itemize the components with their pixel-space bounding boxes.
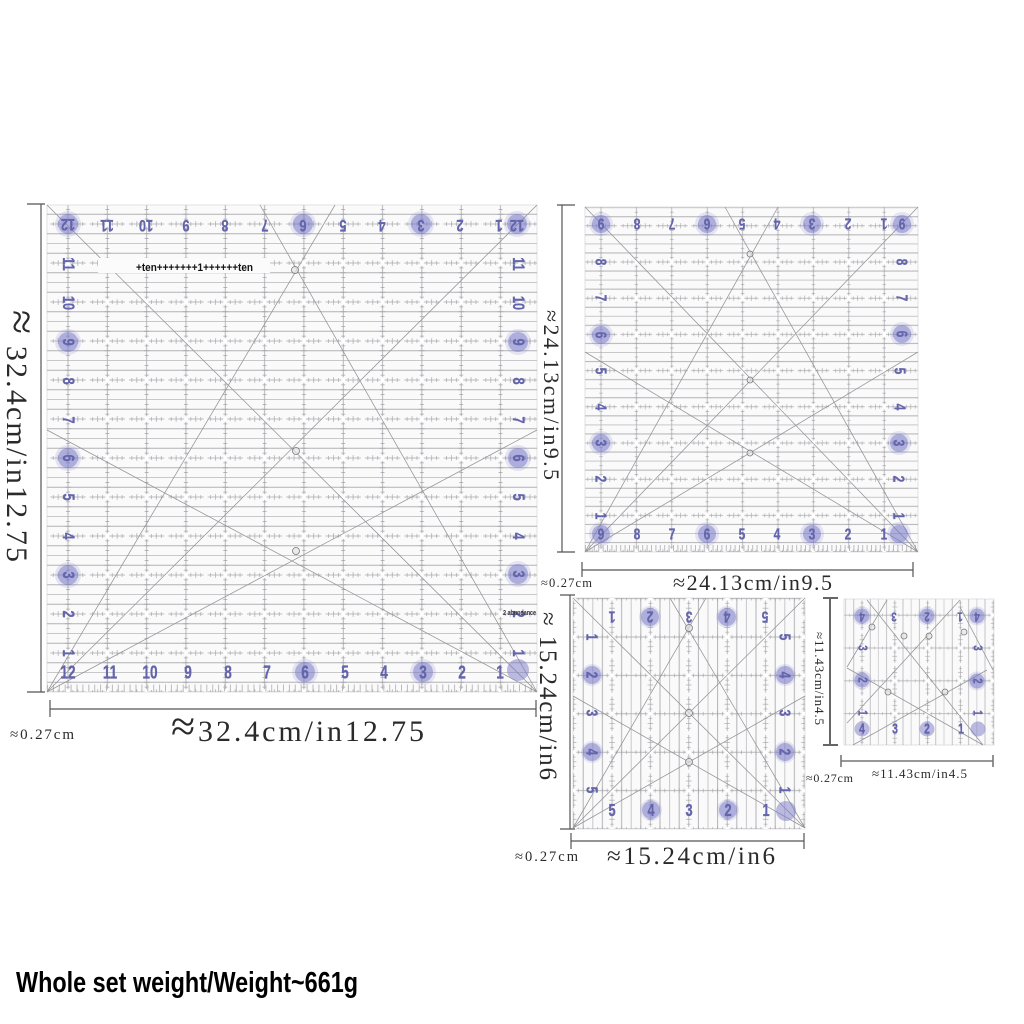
scale numbers: mini ruler: 4 [859,721,865,737]
scale numbers: medium ruler: 1 [881,215,887,233]
scale numbers: small ruler: 5 [776,634,794,640]
scale numbers: medium ruler: 8 [634,215,640,233]
blue circle markers: small ruler [581,606,796,821]
scale numbers: medium ruler: 2 [592,476,610,482]
scale numbers: large ruler: 4 [508,532,528,540]
scale numbers: mini ruler: 2 [924,721,930,737]
scale numbers: medium ruler: 9 [598,525,604,543]
scale numbers: small ruler: 1 [583,634,601,640]
measurement holes: small ruler [686,624,692,766]
scale numbers: large ruler: 7 [263,663,271,683]
scale numbers: large ruler: 11 [508,257,528,271]
scale numbers: small ruler: 4 [776,672,794,678]
scale numbers: large ruler: 1 [496,663,504,683]
scale numbers: medium ruler: 7 [592,295,610,301]
scale numbers: medium ruler: 7 [669,215,675,233]
scale numbers: small ruler [583,608,794,821]
scale numbers: large ruler: 4 [378,215,386,235]
scale numbers: large ruler: 3 [58,571,78,579]
scale numbers: small ruler: 1 [776,787,794,793]
scale numbers: large ruler: 7 [261,215,269,235]
label: medium vertical: ≈24.13cm/in9.5 [539,310,564,480]
label: mini horizontal: ≈11.43cm/in4.5 [872,766,967,781]
scale numbers: mini ruler: 1 [957,609,963,623]
scale numbers: medium ruler: 4 [774,215,780,233]
scale numbers: medium ruler: 5 [891,368,909,374]
label: small gap right: ≈0.27cm [806,771,854,785]
scale numbers: mini ruler: 3 [891,609,897,623]
scale numbers: medium ruler: 1 [890,513,908,519]
scale numbers: mini ruler: 4 [859,609,865,623]
scale numbers: mini ruler [855,609,984,737]
scale numbers: large ruler: 5 [341,663,349,683]
scale numbers: small ruler: 5 [762,608,768,626]
scale numbers: small ruler: 4 [583,749,601,755]
scale numbers: large ruler: 2 [58,610,78,618]
scale numbers: large ruler: 10 [142,663,158,683]
scale numbers: large ruler [58,214,528,683]
scale numbers: large ruler: 11 [103,663,117,683]
scale numbers: medium ruler [592,215,911,543]
scale numbers: small ruler: 4 [647,801,655,821]
scale numbers: large ruler: 7 [58,416,78,424]
scale numbers: large ruler: 10 [139,215,153,235]
scale numbers: large ruler: 12 [510,215,524,235]
scale numbers: medium ruler: 8 [893,259,911,265]
scale numbers: small ruler: 3 [686,608,692,626]
scale numbers: large ruler: 5 [339,215,347,235]
scale numbers: large ruler: 5 [508,493,528,501]
scale numbers: medium ruler: 8 [634,525,640,543]
scale numbers: medium ruler: 9 [598,215,604,233]
scale numbers: medium ruler: 5 [592,368,610,374]
scale numbers: small ruler: 3 [776,710,794,716]
scale numbers: medium ruler: 3 [809,525,815,543]
scale numbers: medium ruler: 3 [592,440,610,446]
scale numbers: large ruler: 10 [508,296,528,310]
scale numbers: large ruler: 8 [224,663,232,683]
label: large horizontal: ≈32.4cm/in12.75 [171,702,424,751]
dimension bars [27,204,993,849]
scale numbers: large ruler: 6 [58,454,78,462]
measurement holes: large ruler [292,266,300,554]
scale numbers: mini ruler: 1 [855,710,869,716]
scale numbers: medium ruler: 1 [592,513,610,519]
scale numbers: small ruler: 5 [583,787,601,793]
blue circle markers: large ruler [55,211,531,685]
scale numbers: medium ruler: 4 [891,404,909,410]
blue circle markers: mini ruler [852,606,986,736]
scale numbers: mini ruler: 2 [855,677,869,683]
label: medium gap: ≈0.27cm [541,576,592,590]
scale numbers: small ruler: 4 [724,608,730,626]
weight caption: Whole set weight/Weight~661g [16,967,358,999]
label: mini vertical: ≈11.43cm/in4.5 [812,632,827,725]
scale numbers: medium ruler: 1 [881,525,887,543]
scale numbers: large ruler: 3 [417,215,425,235]
scale numbers: mini ruler: 1 [958,721,964,737]
scale numbers: medium ruler: 2 [845,525,851,543]
panel: medium ruler 9.5 in [585,207,918,552]
scale numbers: small ruler: 1 [609,608,615,626]
scale numbers: large ruler: 1 [58,649,78,657]
scale numbers: mini ruler: 3 [970,645,984,651]
scale numbers: small ruler: 2 [583,672,601,678]
scale numbers: large ruler: 6 [508,454,528,462]
scale numbers: large ruler: 9 [184,663,192,683]
label: small gap left: ≈0.27cm [515,849,579,865]
scale numbers: medium ruler: 5 [739,215,745,233]
printed label: +ten+++++++1++++++ten [136,262,253,274]
scale numbers: large ruler: 9 [58,338,78,346]
blue circle markers: medium ruler [589,212,914,546]
scale numbers: medium ruler: 6 [893,331,911,337]
scale numbers: medium ruler: 6 [704,525,710,543]
scale numbers: medium ruler: 7 [669,525,675,543]
panel: mini ruler 4.5 in [844,599,994,745]
scale numbers: large ruler: 11 [100,215,114,235]
scale numbers: small ruler: 2 [724,801,732,821]
scale numbers: mini ruler: 2 [924,609,930,623]
scale numbers: medium ruler: 5 [739,525,745,543]
guide lines: small ruler [573,598,805,828]
scale numbers: medium ruler: 3 [809,215,815,233]
scale numbers: large ruler: 2 [508,610,528,618]
scale numbers: large ruler: 4 [380,663,388,683]
scale numbers: large ruler: 3 [508,570,528,578]
scale numbers: large ruler: 3 [419,663,427,683]
scale numbers: large ruler: 9 [182,215,190,235]
panel: large ruler 12.75 in [47,205,537,692]
panel: small ruler 6 in [573,598,805,829]
label: medium horizontal: ≈24.13cm/in9.5 [673,570,832,595]
guide lines: medium ruler [585,207,918,552]
scale numbers: large ruler: 8 [58,377,78,385]
scale numbers: mini ruler: 3 [892,721,898,737]
scale numbers: large ruler: 12 [61,214,75,234]
scale numbers: large ruler: 11 [58,257,78,271]
scale numbers: medium ruler: 2 [845,215,851,233]
scale numbers: large ruler: 7 [508,416,528,424]
scale numbers: medium ruler: 8 [592,259,610,265]
scale numbers: large ruler: 5 [58,493,78,501]
scale numbers: mini ruler: 1 [970,710,984,716]
scale numbers: large ruler: 12 [60,663,76,683]
scale numbers: medium ruler: 6 [704,215,710,233]
scale numbers: large ruler: 10 [58,296,78,310]
label: small vertical: ≈ 15.24cm/in6 [534,612,561,780]
scale numbers: mini ruler: 3 [855,645,869,651]
scale numbers: small ruler: 3 [583,710,601,716]
guide lines: mini ruler [847,600,993,745]
scale numbers: large ruler: 1 [495,215,503,235]
scale numbers: small ruler: 5 [608,801,616,821]
guide lines: large ruler [47,205,537,692]
scale numbers: large ruler: 6 [299,215,307,235]
scale numbers: mini ruler: 4 [974,609,980,623]
scale numbers: medium ruler: 3 [890,440,908,446]
scale numbers: medium ruler: 6 [592,332,610,338]
scale numbers: small ruler: 3 [685,801,693,821]
white label patch [98,258,270,273]
scale numbers: large ruler: 1 [508,649,528,657]
scale numbers: medium ruler: 4 [592,404,610,410]
brand text: 2 abundance [503,608,536,617]
scale numbers: large ruler: 6 [301,663,309,683]
scale numbers: small ruler: 2 [647,608,653,626]
scale numbers: large ruler: 2 [456,215,464,235]
scale numbers: large ruler: 2 [458,663,466,683]
scale numbers: medium ruler: 2 [890,476,908,482]
scale numbers: large ruler: 8 [221,215,229,235]
measurement holes: mini ruler [869,624,967,695]
scale numbers: medium ruler: 9 [899,215,905,233]
scale numbers: small ruler: 1 [762,801,770,821]
scale numbers: medium ruler: 4 [774,525,780,543]
scale numbers: mini ruler: 2 [970,678,984,684]
scale numbers: large ruler: 4 [58,532,78,540]
scale numbers: medium ruler: 7 [893,295,911,301]
scale numbers: large ruler: 9 [508,338,528,346]
label: large gap: ≈0.27cm [10,727,74,743]
scale numbers: large ruler: 8 [508,377,528,385]
scale numbers: small ruler: 2 [776,749,794,755]
label: small horizontal: ≈15.24cm/in6 [607,843,775,870]
dimension labels [0,310,967,870]
measurement holes: medium ruler [747,251,753,456]
